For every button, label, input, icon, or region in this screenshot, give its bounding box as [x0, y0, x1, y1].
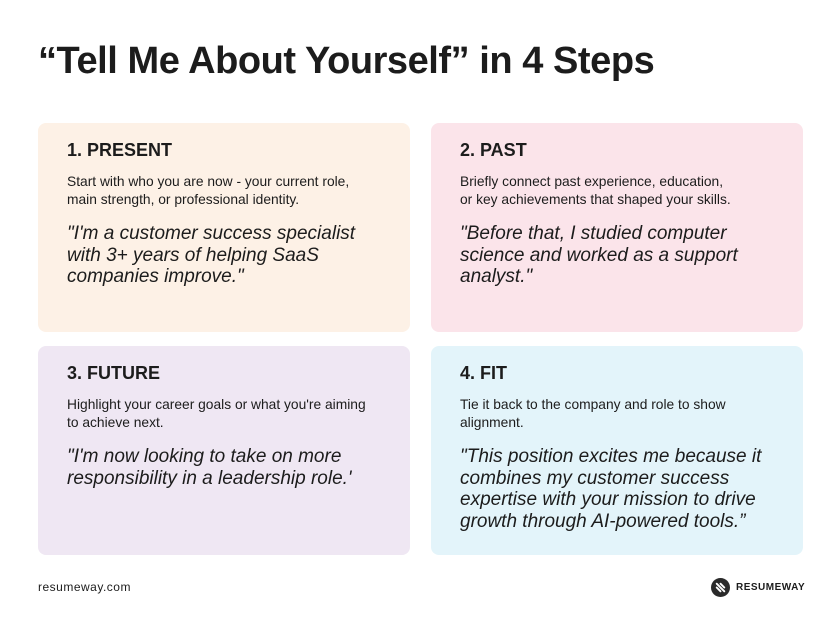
text: past description: or key achievements that shaped your skills.: [460, 192, 731, 207]
text: fit description: [460, 397, 726, 430]
panel: fit: [431, 346, 803, 555]
quote: future: [67, 446, 352, 488]
text: fit description: alignment.: [460, 415, 524, 430]
panel: present: [38, 123, 410, 332]
panel: future: [38, 346, 410, 555]
text: future description: Highlight your career goals or what you're aiming: [67, 397, 366, 412]
text: past description: Briefly connect past experience, education,: [460, 174, 723, 189]
quote: past: science and worked as a support: [460, 244, 738, 266]
footer url: resumeway.com: [38, 580, 131, 594]
quote: fit: combines my customer success: [460, 468, 729, 488]
quote: present: with 3+ years of helping SaaS: [67, 244, 319, 266]
text: fit description: Tie it back to the company and role to show: [460, 397, 726, 412]
quote: fit: [460, 446, 762, 532]
text: future description: [67, 397, 366, 430]
heading: fit: 4. FIT: [460, 363, 507, 383]
text: present description: Start with who you are now - your current role,: [67, 174, 349, 189]
text: present description: [67, 174, 349, 207]
quote: present: "I'm a customer success specialist: [67, 223, 355, 244]
heading: past: 2. PAST: [460, 140, 527, 160]
quote: future: "I'm now looking to take on more: [67, 446, 341, 467]
quote: fit: expertise with your mission to drive: [460, 489, 756, 510]
quote: past: [460, 223, 738, 287]
quote: past: analyst.": [460, 266, 532, 287]
quote: future: responsibility in a leadership role.': [67, 468, 352, 488]
quote: present: [67, 223, 356, 287]
panel: past: [431, 123, 803, 332]
quote: past: "Before that, I studied computer: [460, 223, 727, 244]
logo: RESUMEWAY: [736, 582, 805, 593]
quote: fit: growth through AI-powered tools.”: [460, 510, 746, 532]
logo: [711, 578, 805, 597]
quote: present: companies improve.": [67, 266, 244, 287]
quote: fit: "This position excites me because it: [460, 446, 761, 467]
heading: future: 3. FUTURE: [67, 363, 160, 383]
text: future description: to achieve next.: [67, 415, 164, 430]
text: present description: main strength, or professional identity.: [67, 192, 299, 207]
title: “Tell Me About Yourself” in 4 Steps: [38, 40, 654, 82]
text: past description: [460, 174, 731, 207]
heading: present: 1. PRESENT: [67, 140, 172, 160]
